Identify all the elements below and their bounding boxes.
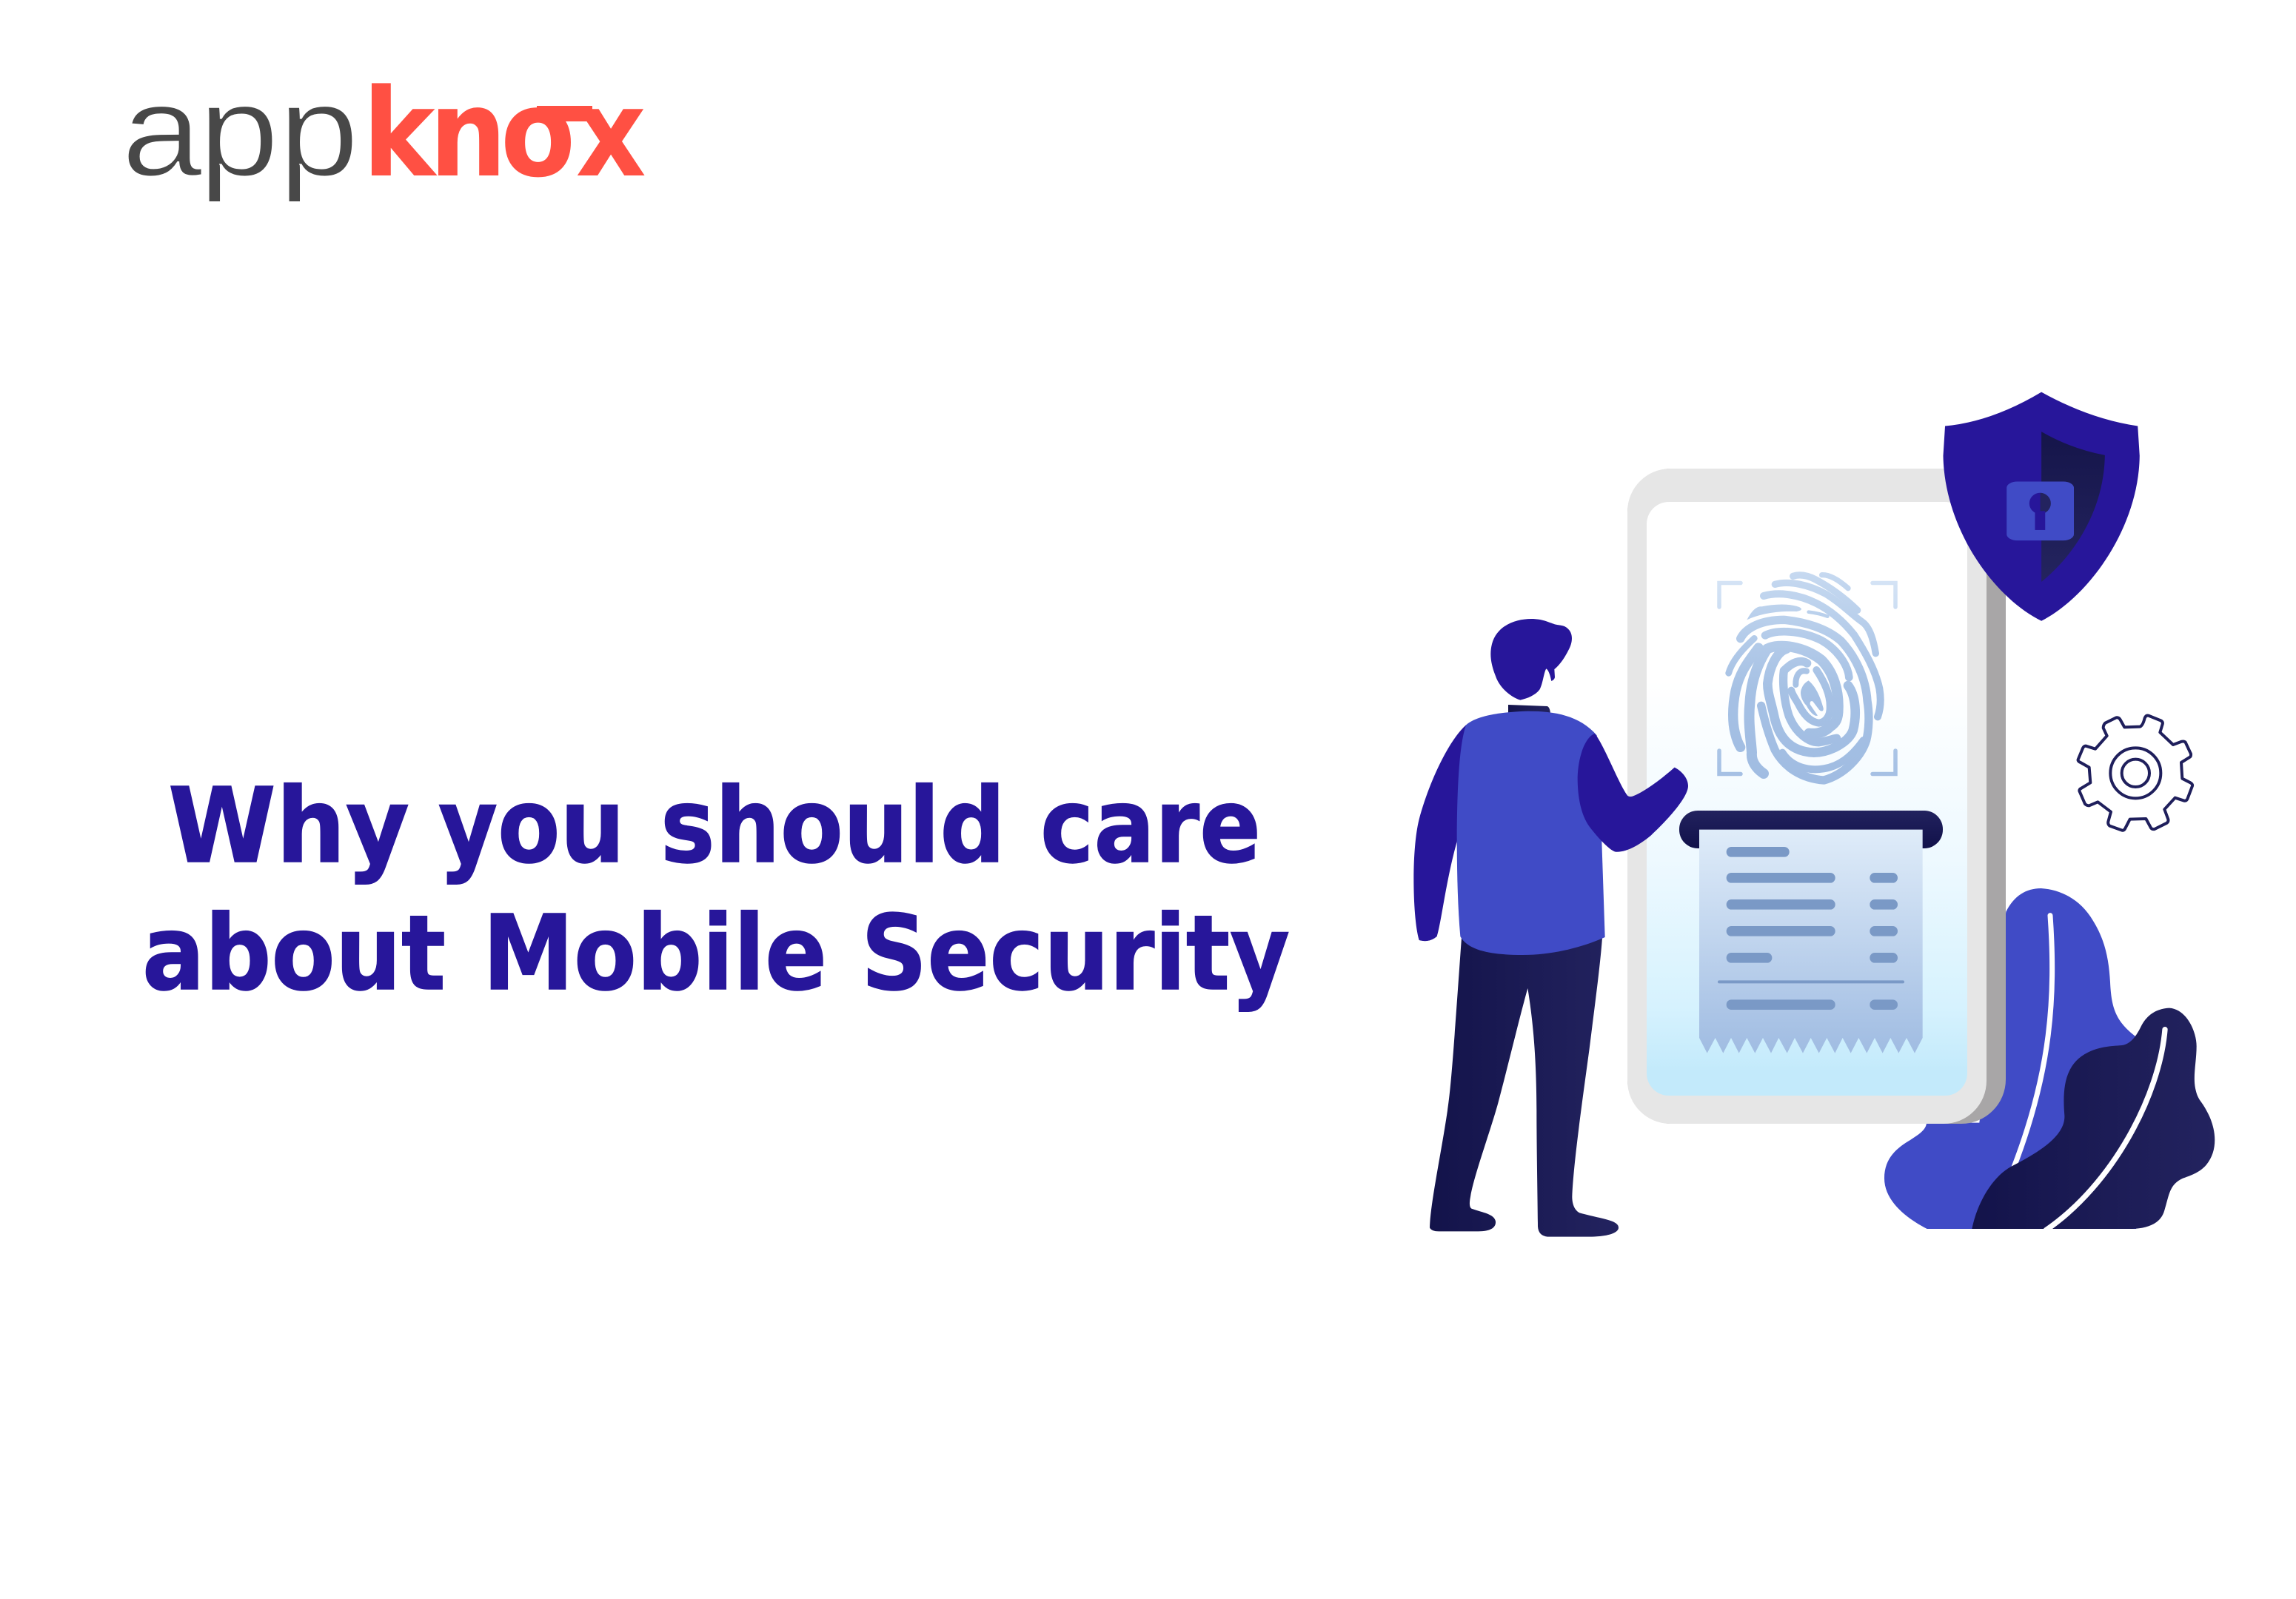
title line 2: Mobile [483,894,827,1014]
phone shadow side [1627,469,2006,1124]
infographic canvas [129,83,2215,1237]
person [1413,619,1688,1237]
upper body [1413,619,1688,955]
title line 1 [168,766,1261,887]
title line 1: you [438,766,625,887]
collar [1508,705,1550,713]
fingerprint ridges [1729,575,1881,780]
shield with lock [1943,392,2140,621]
fingerprint core [1801,680,1824,716]
large plant leaf [1884,888,2136,1229]
title [142,766,1290,1014]
small plant leaf [1972,1008,2215,1230]
title line 2 [142,894,1290,1014]
lock body [2007,482,2074,540]
phone screen [1647,502,1967,1096]
far arm [1413,725,1471,941]
title line 2: Security [861,894,1290,1014]
fingerprint [1729,575,1881,780]
keyhole [2029,493,2051,530]
receipt paper [1699,830,1923,1053]
head [1490,619,1572,700]
receipt printer and receipt [1679,811,1943,1053]
fingerprint blob [1747,605,1801,620]
phone body [1627,469,1987,1124]
near arm [1578,734,1688,852]
title line 2: about [142,894,446,1014]
logo: appknox [121,59,646,204]
shield body [1943,392,2140,621]
legs [1430,938,1619,1237]
shield shaded half [2041,432,2105,582]
title line 1: Why [168,766,409,887]
fingerprint scanner [1719,575,1895,780]
phone [1627,469,2006,1124]
title line 1: care [1040,766,1261,887]
scan brackets [1719,583,1895,774]
torso [1457,711,1605,955]
title line 1: should [660,766,1005,887]
printer slot [1679,811,1943,848]
receipt rows [1718,847,1904,1010]
gear icon [2078,716,2192,831]
logo: appknox: app [121,59,359,204]
logo: appknox: knox [363,63,646,204]
